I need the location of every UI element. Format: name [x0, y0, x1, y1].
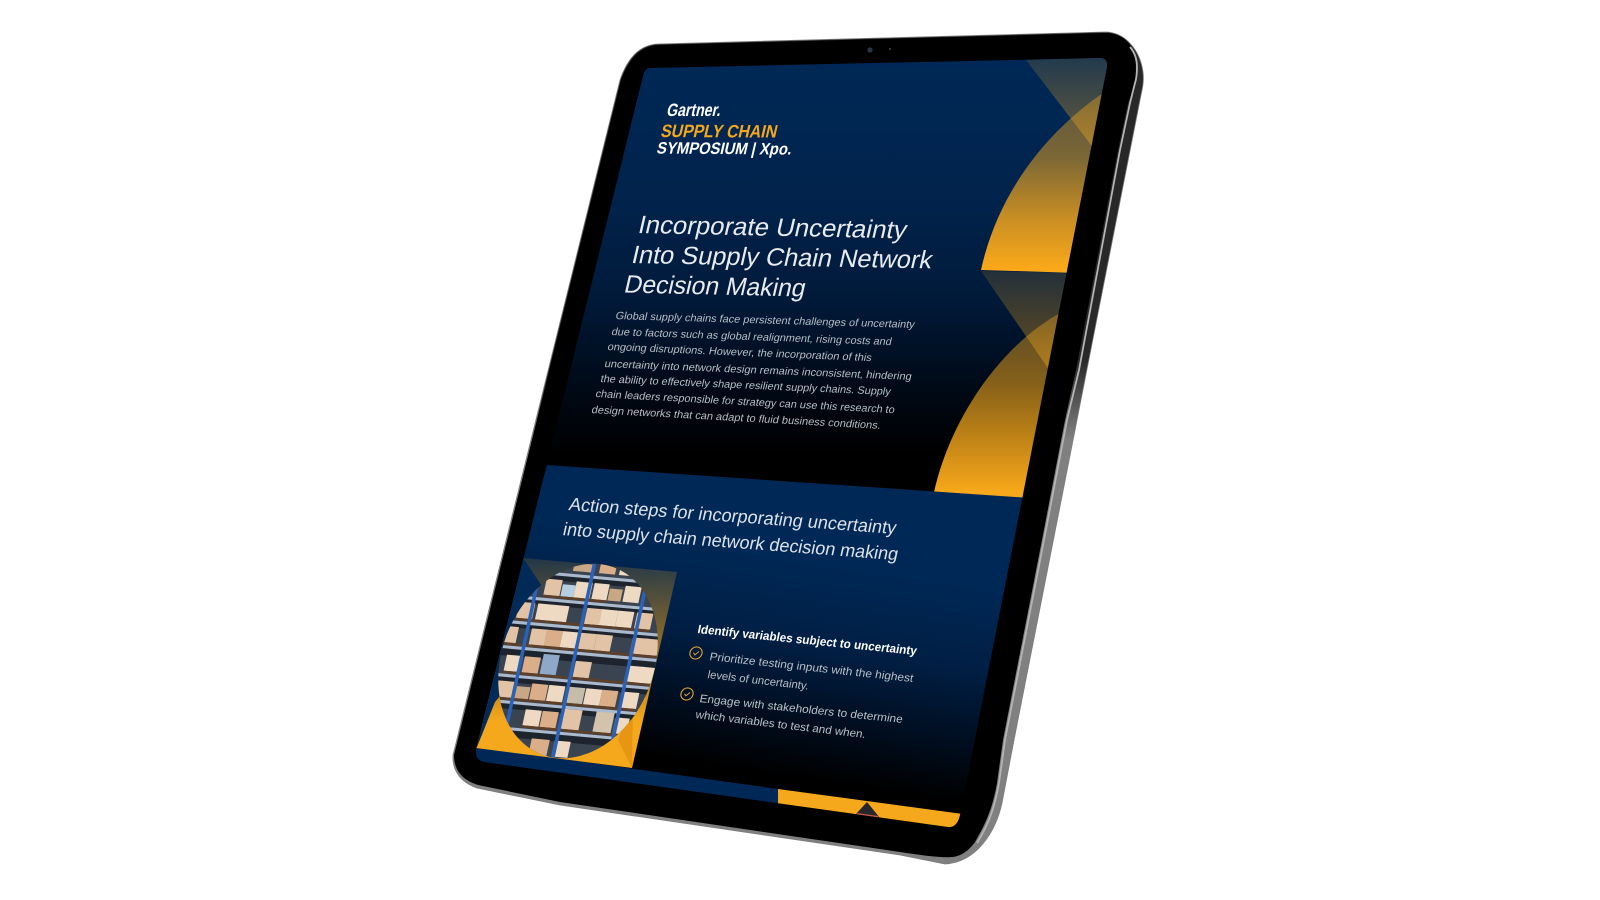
bullet text 2: Engage with stakeholders to determine: [698, 693, 904, 726]
camera: [867, 47, 891, 53]
logo: Gartner: Gartner.: [665, 99, 724, 120]
title: Decision Making: [622, 271, 809, 302]
rack backgrounds: [498, 576, 658, 746]
intro paragraph: design networks that can adapt to fluid business conditions.: [590, 404, 882, 432]
pallets: [500, 594, 657, 736]
bullet text 1: levels of uncertainty.: [706, 669, 810, 693]
tablet mockup infographic: [452, 32, 1144, 864]
icon: bottom image peak: [856, 802, 880, 818]
title: Incorporate Uncertainty: [636, 211, 910, 244]
panel: bottom gold strip: [778, 789, 960, 828]
icon: check 1: [689, 646, 703, 660]
panel: header section background: [556, 58, 1108, 430]
title: Into Supply Chain Network: [629, 241, 936, 274]
image panel with gold backdrop: [476, 558, 677, 768]
intro paragraph: [590, 310, 917, 432]
intro paragraph: Global supply chains face persistent challenges of uncertainty: [614, 310, 917, 331]
icon: check 2: [680, 687, 694, 701]
step heading: Identify variables subject to uncertainty: [696, 622, 918, 658]
decorative gold curve lower: [934, 312, 1062, 500]
decorative gold curve upper: [981, 93, 1110, 273]
title: [622, 211, 936, 302]
decorative gold triangle top right: [1026, 58, 1107, 146]
section heading: action steps: [561, 493, 901, 564]
blue uprights: [506, 564, 646, 758]
panel: action steps section background: [501, 465, 1022, 788]
bullet text 2: which variables to test and when.: [693, 709, 867, 741]
section heading: action steps: Action steps for incorporating uncertainty: [567, 493, 900, 538]
logo: [657, 104, 790, 158]
pallet boxes: [498, 564, 658, 758]
panel: bottom blue strip: [476, 747, 778, 804]
bullet text 1: Prioritize testing inputs with the highest: [708, 651, 915, 685]
tablet body: [453, 32, 1143, 864]
logo: Supply Chain: SUPPLY CHAIN: [659, 120, 780, 142]
intro paragraph: ongoing disruptions. However, the incorporation of this: [606, 341, 873, 364]
intro paragraph: uncertainty into network design remains inconsistent, hindering: [603, 358, 913, 383]
intro paragraph: the ability to effectively shape resilient supply chains. Supply: [599, 373, 893, 398]
bullet text 2: [696, 694, 902, 738]
intro paragraph: due to factors such as global realignment, rising costs and: [610, 326, 893, 348]
step: identify variables: [680, 622, 918, 741]
warehouse photo in circle: [498, 564, 658, 758]
shelves: [498, 572, 658, 740]
intro paragraph: chain leaders responsible for strategy can use this research to: [594, 388, 896, 416]
section heading: action steps: into supply chain network decision making: [561, 518, 901, 564]
decorative gold triangle middle: [981, 271, 1066, 368]
screen: [464, 55, 1115, 835]
logo: Symposium Xpo: SYMPOSIUM | Xpo.: [655, 139, 794, 159]
